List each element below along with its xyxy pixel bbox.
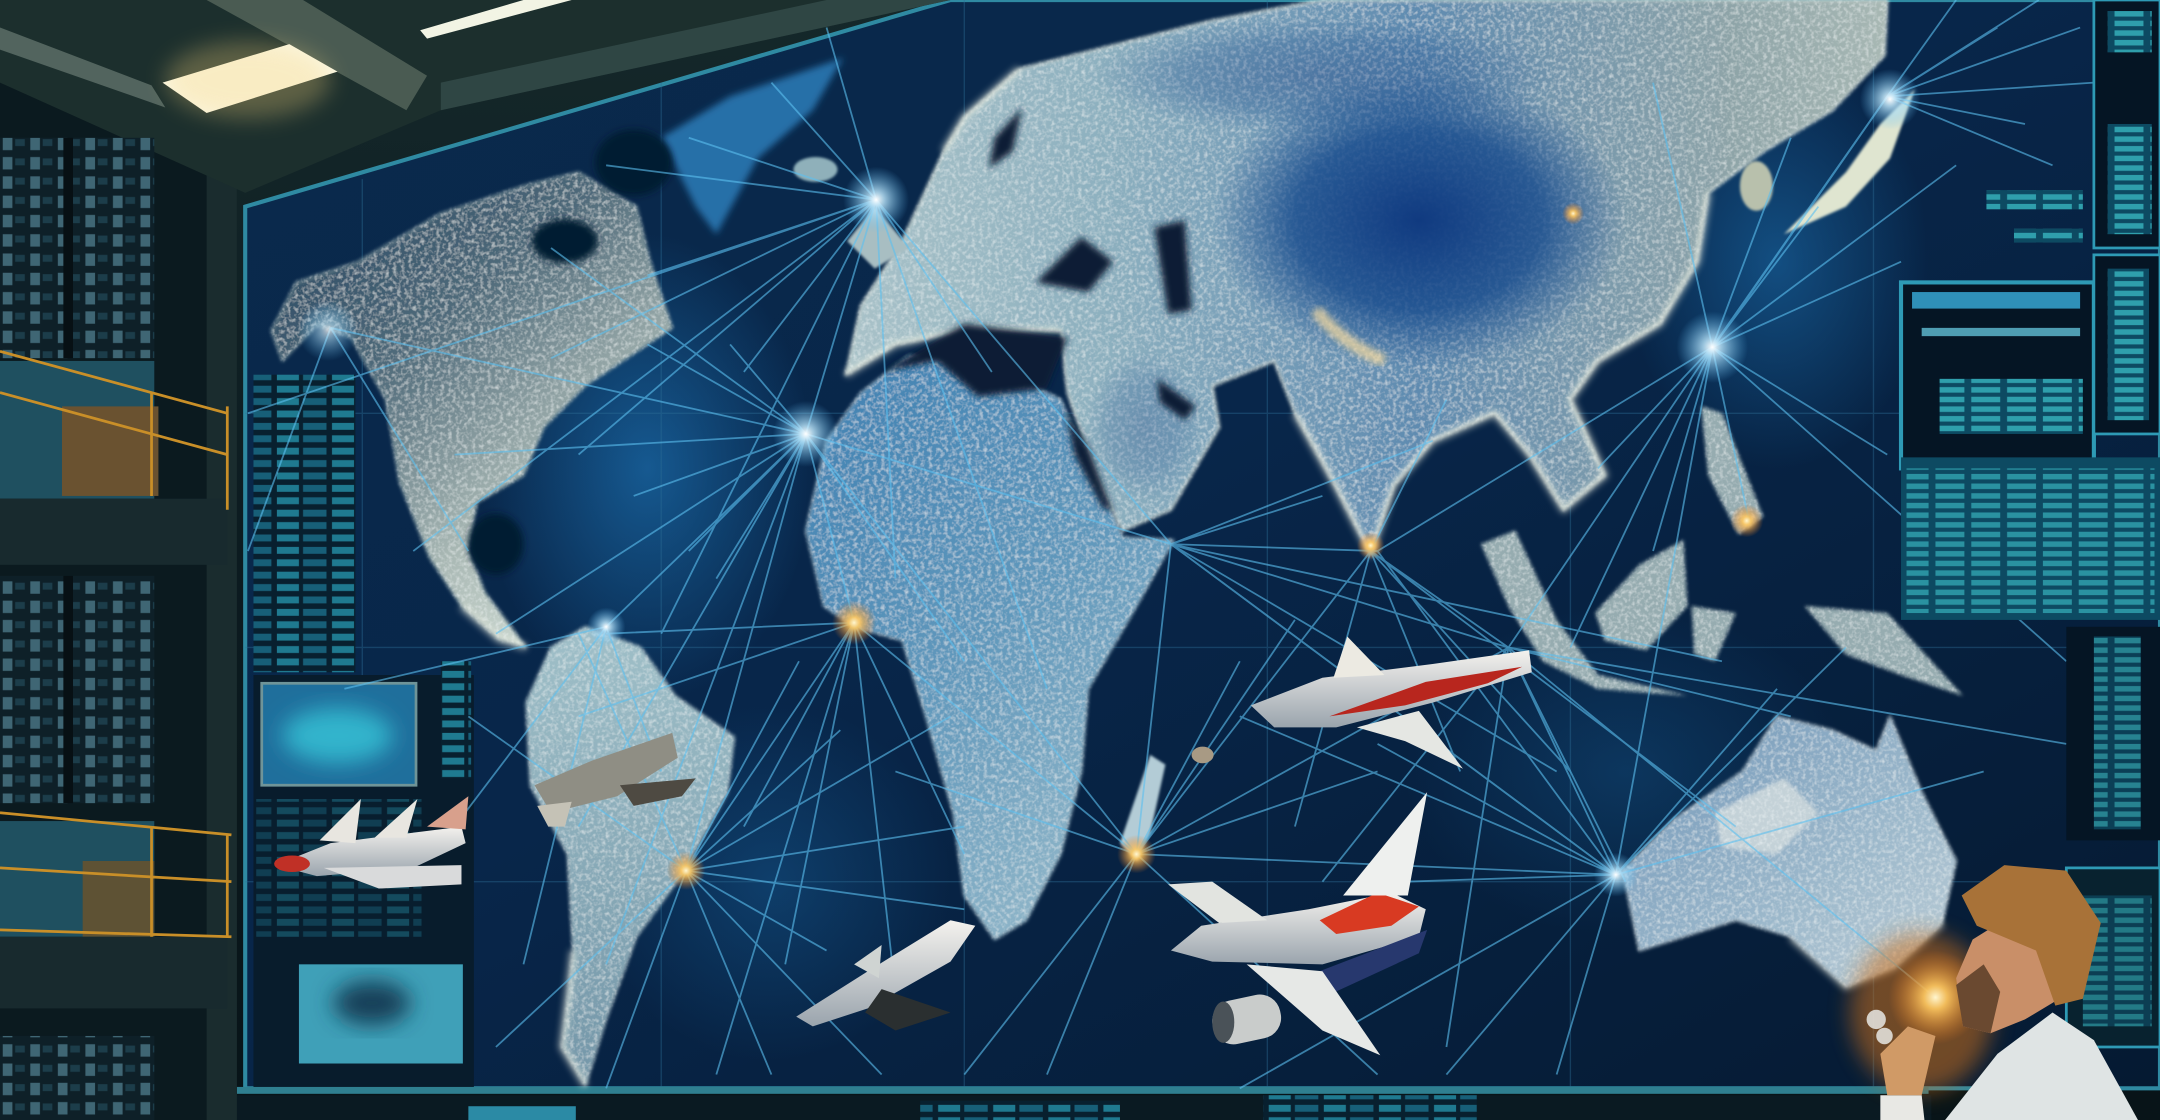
map: Greenland [661,58,843,234]
map: Japan [1740,90,1915,234]
plane: far left white and red [274,796,468,889]
panel: right table [1901,457,2160,620]
map: Africa [806,355,1174,940]
plane: large foreground [1168,792,1427,1055]
plane: Indian Ocean red stripe [1251,636,1532,769]
map: South America [526,627,734,1086]
map: inland seas [882,107,1196,512]
panel: right middle dark screen [1901,255,2160,468]
person: analyst with glowing light [1850,865,2138,1120]
route network hub glows [298,69,1920,897]
plane: South America silver [534,733,696,827]
map: Madagascar [1120,755,1165,861]
panel: right upper data screens [1986,0,2160,248]
panel: left monitor bottom [299,964,463,1064]
plane: lower Africa [796,920,975,1030]
map: central Asia blue shading [1086,18,1626,503]
panel: bottom status strip [234,1087,1931,1120]
panel: left monitor top [262,683,416,785]
map: Southeast Asia and islands [1481,406,1963,696]
map: Eurasia [846,0,1887,554]
panel: left data column [253,375,474,1088]
left building structure [0,0,951,1120]
map: British Isles [793,157,909,269]
map: North America [271,172,672,647]
icon: small capsule [1192,747,1214,763]
map: Australia [1623,716,1956,986]
map: lit coastlines [461,69,1942,1086]
panel: right lower screens [2066,627,2160,1047]
map: arctic islands [468,129,672,574]
